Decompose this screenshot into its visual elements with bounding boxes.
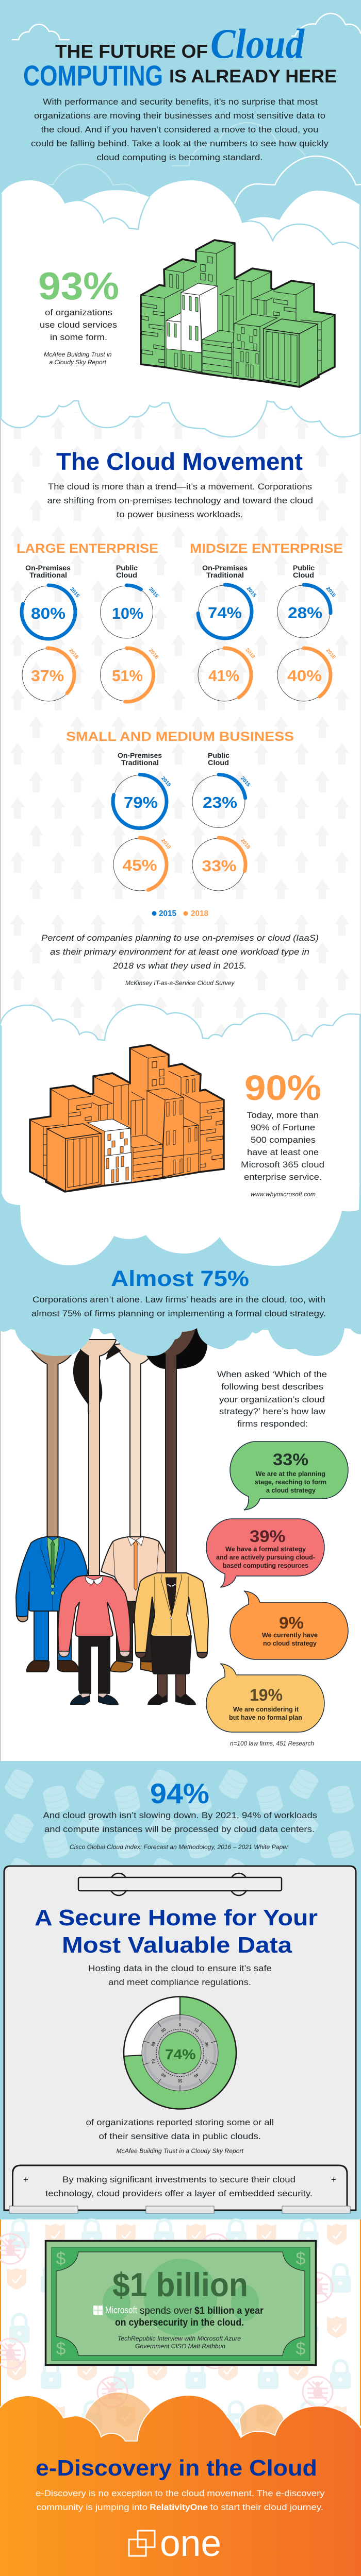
panel: dollar bill	[45, 2241, 316, 2365]
speech bubble: 33%: 33%	[273, 1450, 308, 1469]
stat: 93%	[38, 264, 119, 366]
stat: 94%: And cloud growth isn’t slowing down. By 2021, 94% of workloads	[43, 1810, 317, 1820]
survey question: When asked ‘Which of the	[217, 1369, 327, 1379]
gauge: 10%	[100, 585, 159, 639]
stat: 90%: 90%	[244, 1068, 321, 1108]
chart caption: McKinsey IT-as-a-Service Cloud Survey	[125, 979, 235, 987]
speech bubble: 9%: no cloud strategy	[263, 1639, 317, 1647]
chart caption: as their primary environment for at least one workload type in	[50, 947, 309, 957]
background outline clouds	[12, 13, 361, 204]
chart: 74% vault dial donut: 20	[204, 2041, 209, 2047]
stat: 93%: McAfee Building Trust in	[44, 351, 112, 358]
stat: 93%: a Cloudy Sky Report	[50, 359, 107, 366]
inner card: embedded security: +	[331, 2175, 336, 2184]
white cloud mass: section 93%	[0, 180, 361, 437]
speech bubble: 9%: We currently have	[262, 1631, 318, 1639]
gauge: 28%	[277, 585, 337, 638]
gauge: 51%: 51%	[112, 667, 143, 685]
intro paragraph: could be falling behind. Take a look at the numbers to see how quickly	[31, 139, 329, 148]
speech bubble: 39%: based computing resources	[223, 1562, 308, 1569]
panel: midsize enterprise: Public	[293, 564, 315, 572]
stat: 90%: Today, more than	[247, 1110, 319, 1120]
intro paragraph: the cloud. And if you haven’t considered a move to the cloud, you	[41, 125, 319, 134]
survey source: n=100 law firms, 451 Research	[230, 1740, 314, 1747]
bill corner dollar signs: $	[296, 2339, 306, 2359]
intro paragraph	[31, 97, 329, 162]
speech bubble: 19%	[206, 1664, 324, 1732]
blue band: almost 75% background	[0, 1180, 361, 1356]
gauge: 37%	[21, 648, 79, 702]
heading: e-Discovery: e-Discovery in the Cloud	[36, 2455, 317, 2481]
chart: 74% vault dial donut: 70	[151, 2058, 156, 2064]
stat: 90%: have at least one	[247, 1147, 319, 1157]
gauge: 79%: 79%	[124, 793, 158, 811]
arrow background pattern	[0, 412, 361, 1046]
panel: small and medium business: Cloud	[208, 758, 229, 767]
gauge: 28%: 28%	[288, 604, 322, 622]
person: man in blue suit	[16, 1340, 88, 1672]
bill statement: on cybersecurity in the cloud.	[115, 2317, 244, 2328]
cloud movement paragraph: The cloud is more than a trend—it’s a movement. Corporations	[48, 482, 312, 492]
chart caption: Percent of companies planning to use on-premises or cloud (IaaS)	[41, 933, 319, 943]
title	[23, 20, 337, 92]
secure home paragraph: Hosting data in the cloud to ensure it’s safe	[88, 1963, 272, 1973]
speech bubble: 39%	[206, 1519, 324, 1587]
panel: midsize enterprise	[190, 541, 343, 702]
gauge: 45%: 45%	[123, 856, 157, 874]
stat: 90%: 90% of Fortune	[251, 1123, 315, 1132]
donut caption: of their sensitive data in public clouds.	[99, 2131, 261, 2141]
bill corner dollar signs	[56, 2249, 306, 2359]
chart: 74% vault dial donut: 10	[193, 2027, 200, 2033]
gauge: 23%: 2015	[239, 775, 251, 788]
gauge: 40%	[277, 648, 337, 702]
speech bubble: 33%	[230, 1442, 348, 1510]
bill portrait ornament	[103, 2259, 259, 2336]
speech bubble: 39%: and are actively pursuing cloud-	[216, 1553, 315, 1561]
heading: secure home: A Secure Home for Your	[35, 1905, 318, 1930]
intro paragraph: organizations are moving their businesses and most sensitive data to	[34, 111, 325, 121]
secure home paragraph: and meet compliance regulations.	[108, 1977, 251, 1987]
person: woman in pink top	[58, 1340, 130, 1705]
inner card: embedded security	[12, 2165, 347, 2209]
gauge: 74%	[198, 585, 257, 638]
translucent back clouds	[85, 2392, 284, 2445]
panel: large enterprise: Traditional	[29, 571, 67, 579]
panel: midsize enterprise: Traditional	[206, 571, 244, 579]
side borders of people section	[0, 1324, 1, 1761]
panel: small and medium business: SMALL AND MEDIUM BUSINESS	[66, 730, 294, 744]
bill statement: spends over	[140, 2306, 193, 2316]
title: Cloud	[210, 20, 305, 67]
person: woman in yellow jacket	[135, 1324, 208, 1704]
panel: large enterprise: LARGE ENTERPRISE	[17, 541, 158, 556]
gauge: 79%: 2015	[160, 775, 172, 788]
panel: dollar bill: $1 billion	[112, 2266, 248, 2303]
gauge: 51%: 2018	[147, 648, 159, 660]
speech bubble: 33%: a cloud strategy	[266, 1486, 316, 1494]
gauge: 33%	[192, 838, 251, 891]
database pattern	[3, 1767, 355, 1890]
section: intro sky background	[0, 0, 361, 247]
e-discovery paragraph: community is jumping into	[36, 2502, 147, 2512]
survey question: your organization’s cloud	[219, 1395, 325, 1404]
section: blue data background	[0, 1761, 361, 2219]
gauge: 41%: 41%	[208, 667, 239, 685]
stat: 90%: www.whymicrosoft.com	[251, 1191, 316, 1198]
speech bubble: 33%: We are at the planning	[256, 1470, 325, 1478]
stat: 94%: Cisco Global Cloud Index: Forecast an Methodology, 2016 – 2021 White Paper	[70, 1843, 289, 1851]
illustration: orange city	[30, 1045, 224, 1192]
title: COMPUTING	[23, 59, 163, 92]
bill corner dollar signs: $	[56, 2249, 66, 2268]
section: security pattern background	[0, 2219, 361, 2446]
gauge: 51%	[100, 648, 159, 702]
gauge: 37%: 2018	[68, 648, 79, 660]
speech bubble: 33%: stage, reaching to form	[255, 1478, 326, 1486]
gauge: 23%: 23%	[203, 793, 237, 811]
illustration: green city	[141, 240, 335, 387]
secure home paragraph	[88, 1963, 272, 1987]
gauge: 80%	[22, 585, 80, 639]
panel: small and medium business: On-Premises	[118, 751, 162, 759]
inner card: embedded security: By making significant investments to secure their cloud	[62, 2175, 296, 2184]
speech bubble: 39%: 39%	[250, 1527, 286, 1546]
stat: 94%	[43, 1777, 317, 1851]
gauge: 40%: 2018	[325, 648, 337, 660]
logo: RelativityOne: one	[160, 2523, 221, 2564]
gauge: 45%	[113, 838, 172, 891]
bill source: TechRepublic Interview with Microsoft Azure	[118, 2335, 241, 2342]
clipboard clip	[78, 1873, 282, 1895]
panel: orange cloud	[0, 2395, 361, 2576]
icon: microsoft logo	[93, 2305, 137, 2315]
gauge: 41%	[198, 647, 256, 702]
illustration: four business people with heads in the clouds	[16, 1324, 208, 1705]
panel: small and medium business: Traditional	[121, 758, 159, 767]
logo: RelativityOne	[129, 2523, 221, 2564]
inner card: embedded security: +	[23, 2175, 28, 2184]
stat: 90%: Microsoft 365 cloud	[241, 1160, 324, 1170]
panel: large enterprise: Cloud	[116, 571, 137, 579]
chart: 74% vault dial donut: 90	[160, 2027, 167, 2033]
chart: 74% vault dial donut: 30	[204, 2059, 209, 2064]
stat: 93%: 93%	[38, 264, 119, 308]
bill statement	[115, 2306, 264, 2328]
panel: midsize enterprise: On-Premises	[202, 564, 248, 572]
survey question: firms responded:	[237, 1419, 308, 1429]
intro paragraph: cloud computing is becoming standard.	[97, 152, 263, 162]
gauge: 80%: 2015	[69, 586, 80, 599]
gauge: 45%: 2018	[160, 838, 172, 851]
law firm paragraph: Corporations aren’t alone. Law firms’ heads are in the cloud, too, with	[32, 1295, 325, 1304]
donut caption: of organizations reported storing some or all	[86, 2117, 274, 2127]
inner card: embedded security: technology, cloud providers offer a layer of embedded security.	[45, 2189, 313, 2198]
bill statement: $1 billion a year	[194, 2306, 264, 2316]
gauge: 74%: 2015	[245, 586, 257, 599]
intro paragraph: With performance and security benefits, it’s no surprise that most	[43, 97, 318, 107]
chart caption	[41, 933, 319, 987]
gauge: 28%: 2015	[325, 586, 337, 599]
law firm paragraph: almost 75% of firms planning or implementing a formal cloud strategy.	[31, 1309, 326, 1318]
chart: 74% vault dial donut: 50	[177, 2078, 182, 2083]
donut caption	[86, 2117, 274, 2155]
gauge: 37%: 37%	[31, 667, 64, 685]
heading: The Cloud Movement: The Cloud Movement	[56, 448, 303, 475]
stat: 90%	[241, 1068, 324, 1198]
chart: 74% vault dial donut: 80	[151, 2041, 156, 2047]
panel: large enterprise: Public	[116, 564, 138, 572]
panel: large enterprise: On-Premises	[25, 564, 71, 572]
gauge: 33%: 33%	[202, 857, 236, 875]
stat: 94%: 94%	[150, 1777, 209, 1809]
gauge: 41%: 2018	[244, 647, 256, 660]
e-discovery paragraph: to start their cloud journey.	[210, 2502, 323, 2512]
gauge: 10%: 10%	[112, 604, 143, 622]
chart: 74% vault dial donut: 40	[193, 2072, 200, 2079]
panel: clipboard	[4, 1866, 356, 2213]
panel: small and medium business: Public	[208, 751, 229, 759]
chart: 74% vault dial donut: 74%	[165, 2046, 196, 2062]
title: IS ALREADY HERE	[169, 66, 337, 87]
gauge: 33%: 2018	[239, 838, 251, 851]
panel: midsize enterprise: MIDSIZE ENTERPRISE	[190, 541, 343, 556]
survey question: following best describes	[221, 1382, 323, 1392]
gauge: 10%: 2015	[147, 586, 159, 599]
stat: 94%: and compute instances will be processed by cloud data centers.	[44, 1824, 315, 1834]
bill corner dollar signs: $	[296, 2249, 306, 2268]
panel: large enterprise	[17, 541, 159, 702]
gauge: 79%	[113, 775, 172, 828]
speech bubble: 39%: We have a formal strategy	[225, 1545, 306, 1553]
panel: small and medium business	[66, 730, 294, 891]
speech bubble: 9%: 9%	[279, 1614, 304, 1632]
speech bubble: 19%: 19%	[250, 1686, 283, 1704]
legend: 2015	[159, 909, 176, 918]
e-discovery paragraph	[36, 2488, 325, 2512]
cloud movement paragraph	[47, 482, 313, 519]
speech bubble: 9%	[230, 1591, 348, 1659]
law firm paragraph	[31, 1295, 326, 1318]
stat: 93%: use cloud services	[40, 320, 117, 330]
gauge: 74%: 74%	[208, 604, 242, 622]
panel: midsize enterprise: Cloud	[293, 571, 314, 579]
donut caption: McAfee Building Trust in a Cloudy Sky Report	[117, 2147, 244, 2155]
stat: 90%: 500 companies	[251, 1135, 316, 1145]
white cloud: section 90%	[0, 1005, 361, 1210]
cloud movement paragraph: are shifting from on-premises technology and toward the cloud	[47, 496, 313, 505]
clipboard tabs	[9, 2206, 350, 2213]
survey question	[217, 1369, 327, 1429]
heading: secure home: Most Valuable Data	[62, 1933, 292, 1958]
bill source	[118, 2335, 241, 2350]
cloud movement paragraph: to power business workloads.	[117, 510, 243, 519]
bill source: Government CISO Matt Rathbun	[135, 2343, 225, 2350]
legend	[152, 909, 208, 918]
stat: 90%: enterprise service.	[244, 1172, 322, 1182]
gauge: 40%: 40%	[287, 667, 322, 685]
legend: 2018	[191, 909, 208, 918]
chart: 74% vault dial donut: 0	[179, 2023, 182, 2027]
stat: 93%: in some form.	[50, 332, 107, 342]
e-discovery paragraph: e-Discovery is no exception to the cloud movement. The e-discovery	[36, 2488, 325, 2498]
e-discovery paragraph: RelativityOne	[150, 2502, 208, 2512]
heading: secure home	[35, 1905, 318, 1958]
gauge: 80%: 80%	[31, 604, 65, 622]
speech bubble: 19%: but have no formal plan	[229, 1714, 302, 1721]
heading: Almost 75%: Almost 75%	[111, 1266, 249, 1291]
person: man in peach shirt	[101, 1340, 166, 1672]
icon: microsoft logo: Microsoft	[105, 2305, 137, 2315]
gauge: 23%	[192, 775, 251, 828]
bill corner dollar signs: $	[56, 2339, 66, 2359]
survey question: strategy?’ here’s how law	[219, 1406, 326, 1416]
speech bubble: 19%: We are considering it	[233, 1705, 299, 1713]
chart caption: 2018 vs what they used in 2015.	[112, 961, 247, 971]
title: THE FUTURE OF	[55, 41, 208, 62]
chart: 74% vault dial donut	[124, 1996, 236, 2109]
stat: 93%: of organizations	[45, 308, 112, 317]
chart: 74% vault dial donut: 60	[160, 2072, 167, 2078]
